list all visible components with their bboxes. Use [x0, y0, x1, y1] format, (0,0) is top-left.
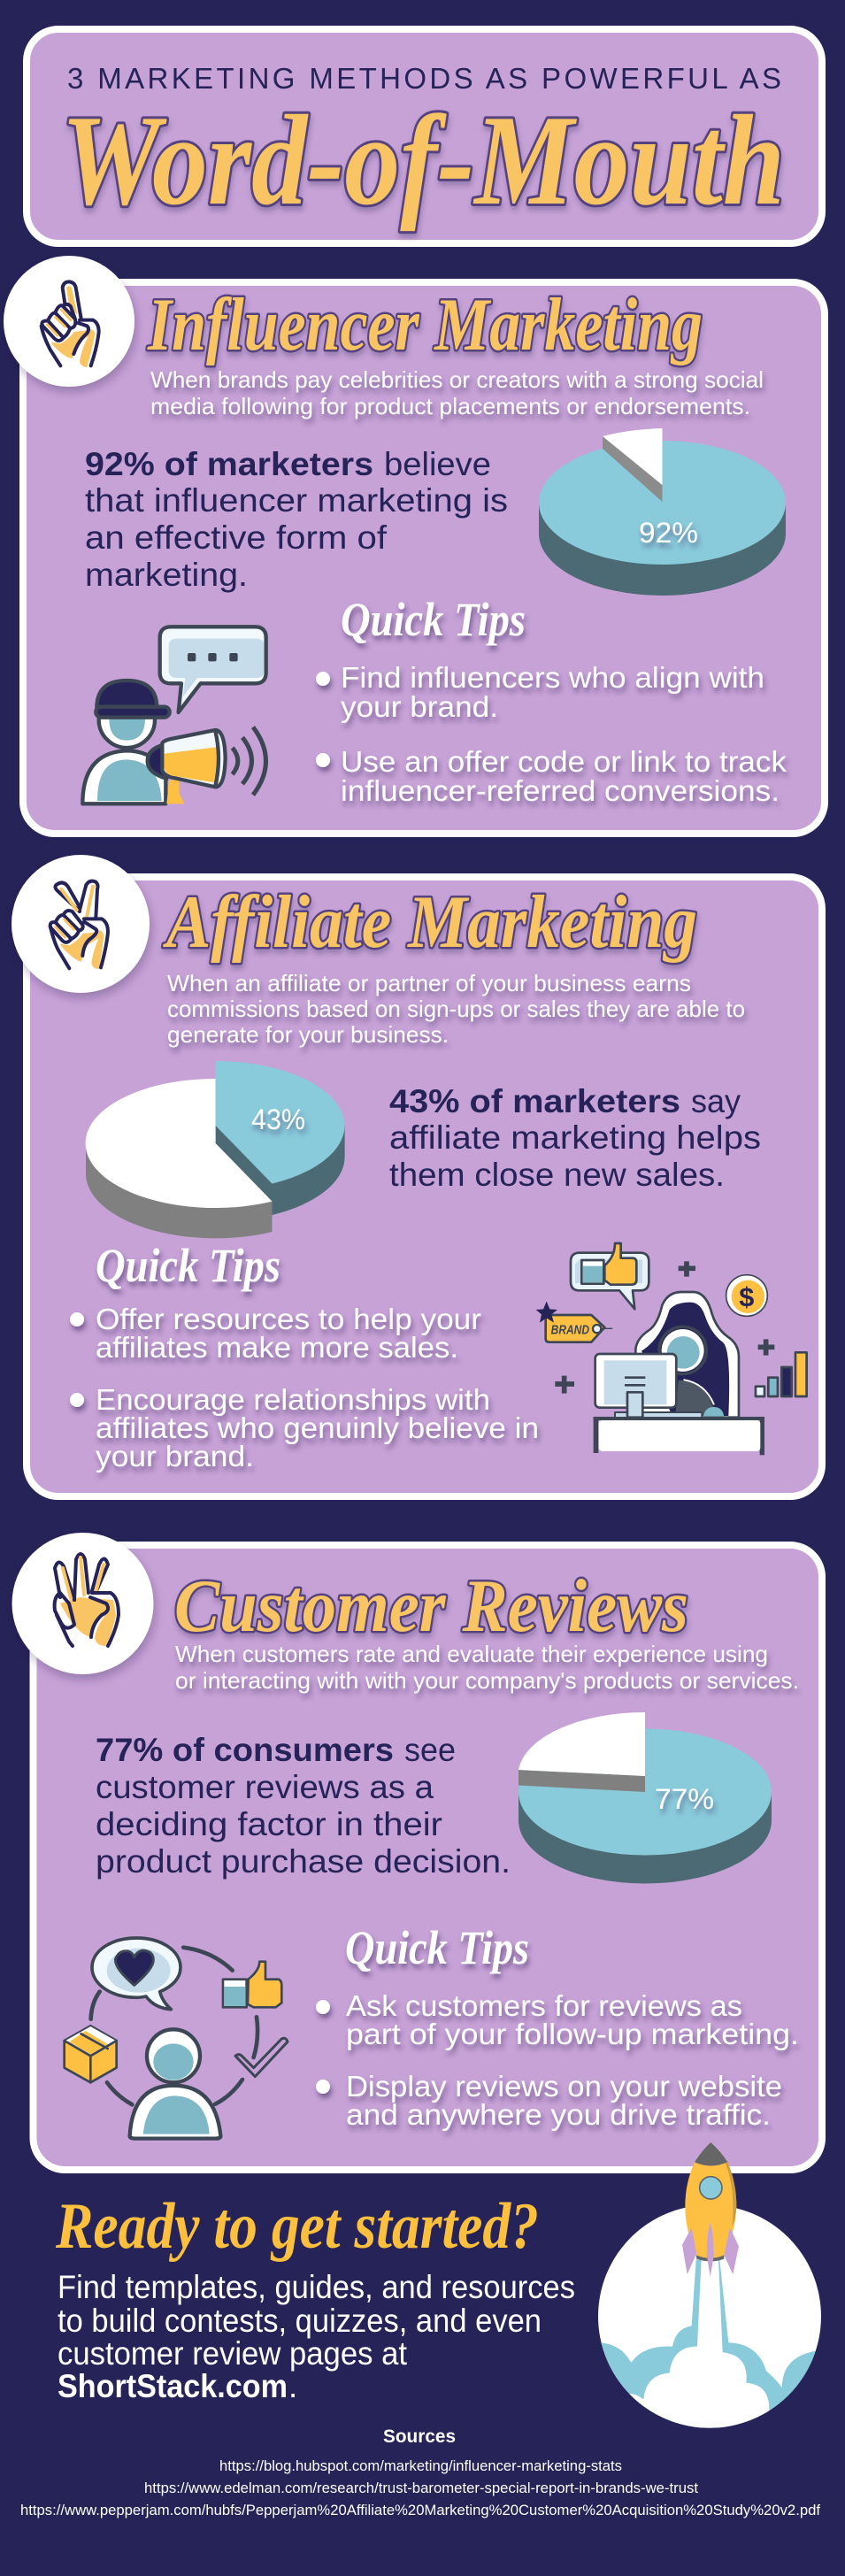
- tips list: influencer-referred conversions.: [341, 774, 780, 807]
- call to action text: Find templates, guides, and resources: [58, 2269, 575, 2305]
- call to action text: ShortStack.com: [58, 2368, 288, 2404]
- tips list: affiliates who genuinly believe in: [96, 1411, 539, 1444]
- statistic text: [85, 446, 508, 593]
- tips list: Display reviews on your website: [346, 2070, 782, 2103]
- sources: [20, 2426, 820, 2518]
- number badge with three finger hand: [12, 1533, 154, 1674]
- icon: three finger hand: [55, 1554, 119, 1646]
- tips list: Find influencers who align with: [341, 661, 764, 694]
- tips list: [316, 1989, 799, 2131]
- section title: Affiliate Marketing: [163, 880, 697, 964]
- call to action text: customer review pages at: [58, 2335, 408, 2372]
- description: [175, 1641, 799, 1694]
- panel: customer reviews: [12, 1533, 822, 2170]
- description: media following for product placements or endorsements.: [150, 393, 750, 419]
- pie chart 92%: [539, 428, 786, 596]
- statistic text: see: [404, 1732, 456, 1768]
- description: When an affiliate or partner of your business earns: [167, 970, 691, 996]
- statistic text: [96, 1732, 511, 1880]
- tips list: Offer resources to help your: [96, 1303, 481, 1335]
- statistic text: [389, 1083, 761, 1193]
- sources links: https://blog.hubspot.com/marketing/influencer-marketing-stats: [219, 2457, 622, 2474]
- statistic text: 92% of marketers: [85, 446, 373, 482]
- number badge with pointing hand: [4, 256, 134, 387]
- pie chart 77%: [519, 1712, 772, 1883]
- tips list: part of your follow-up marketing.: [346, 2018, 799, 2050]
- statistic text: believe: [384, 446, 491, 482]
- statistic text: product purchase decision.: [96, 1843, 511, 1880]
- illustration: rocket launch: [593, 2142, 821, 2434]
- icon: one finger hand: [42, 281, 99, 367]
- tips list: affiliates make more sales.: [96, 1331, 458, 1364]
- kicker heading: 3 MARKETING METHODS AS POWERFUL AS: [67, 62, 781, 95]
- section title: Customer Reviews: [174, 1565, 688, 1648]
- call to action text: .: [288, 2368, 297, 2404]
- sources heading: Sources: [383, 2426, 456, 2447]
- sources links: https://www.edelman.com/research/trust-barometer-special-report-in-brands-we-trust: [144, 2480, 698, 2496]
- statistic text: an effective form of: [85, 519, 388, 556]
- tips list: and anywhere you drive traffic.: [346, 2098, 771, 2131]
- call to action heading: Ready to get started?: [55, 2190, 539, 2263]
- description: commissions based on sign-ups or sales they are able to: [167, 996, 745, 1022]
- description: When customers rate and evaluate their experience using: [175, 1641, 768, 1667]
- statistic text: affiliate marketing helps: [389, 1119, 761, 1156]
- description: or interacting with with your company's products or services.: [175, 1667, 799, 1694]
- statistic text: that influencer marketing is: [85, 482, 508, 519]
- number badge with peace hand: [12, 855, 150, 993]
- description: generate for your business.: [167, 1021, 449, 1048]
- tips list: your brand.: [341, 690, 498, 723]
- description: When brands pay celebrities or creators with a strong social: [150, 366, 764, 393]
- panel: header: [27, 29, 822, 243]
- statistic text: say: [691, 1083, 741, 1119]
- statistic text: 77% of consumers: [96, 1732, 394, 1768]
- statistic text: deciding factor in their: [96, 1806, 442, 1842]
- quick tips heading: Quick Tips: [96, 1239, 280, 1292]
- call to action text: to build contests, quizzes, and even: [58, 2303, 542, 2339]
- pie chart 43%: 43%: [251, 1103, 305, 1135]
- icon: affiliate at desk: BRAND: [551, 1323, 589, 1337]
- icon: customer review cycle: [65, 1938, 288, 2139]
- sources links: https://www.pepperjam.com/hubfs/Pepperjam%20Affiliate%20Marketing%20Customer%20Acquisition%20Study%20v2.pdf: [20, 2502, 820, 2518]
- sources links: [20, 2457, 820, 2518]
- icon: person with megaphone: [82, 627, 266, 804]
- tips list: Ask customers for reviews as: [346, 1989, 742, 2022]
- tips list: your brand.: [96, 1440, 254, 1473]
- icon: affiliate at desk: [536, 1243, 807, 1455]
- description: [150, 366, 764, 419]
- pie chart 43%: [86, 1061, 345, 1238]
- statistic text: them close new sales.: [389, 1157, 725, 1193]
- description: [167, 970, 745, 1048]
- quick tips heading: Quick Tips: [345, 1921, 529, 1974]
- statistic text: marketing.: [85, 557, 248, 593]
- quick tips heading: Quick Tips: [341, 593, 526, 646]
- tips list: [316, 661, 787, 807]
- tips list: Use an offer code or link to track: [341, 745, 787, 778]
- icon: affiliate at desk: $: [739, 1282, 754, 1312]
- tips list: Encourage relationships with: [96, 1383, 490, 1416]
- icon: two finger hand: [50, 881, 108, 969]
- section title: Influencer Marketing: [147, 283, 703, 366]
- pie chart 77%: 77%: [655, 1783, 714, 1815]
- panel: affiliate marketing: [12, 855, 822, 1496]
- statistic text: customer reviews as a: [96, 1769, 434, 1805]
- pie chart 92%: 92%: [639, 517, 698, 549]
- call to action text: [58, 2269, 575, 2404]
- statistic text: 43% of marketers: [389, 1083, 680, 1119]
- panel: influencer marketing: [4, 256, 825, 834]
- tips list: [70, 1303, 539, 1473]
